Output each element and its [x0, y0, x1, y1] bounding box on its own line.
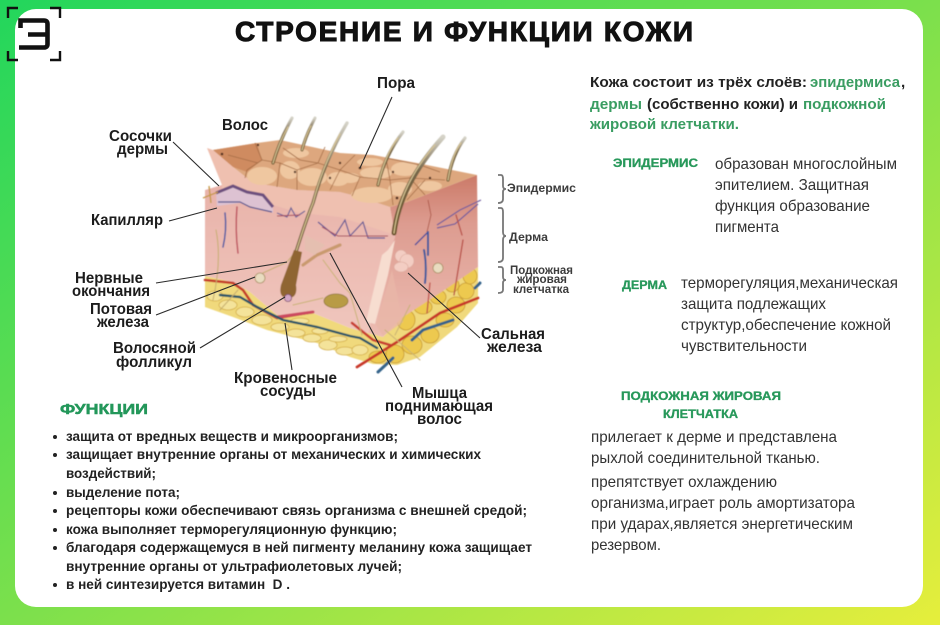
epidermis description: функция образование — [715, 198, 870, 215]
subcutaneous fat heading: КЛЕТЧАТКА — [663, 407, 738, 421]
diagram labels: волос — [417, 411, 462, 428]
diagram labels: Мышца — [412, 385, 467, 402]
functions list: защищает внутренние органы от механических и химических — [66, 446, 481, 462]
epidermis description: эпителием. Защитная — [715, 177, 869, 194]
diagram labels — [72, 75, 545, 428]
intro text — [589, 74, 905, 133]
sebaceous gland — [394, 250, 414, 272]
subcutaneous fat heading — [621, 389, 781, 421]
dermis description: чувствительности — [681, 338, 807, 355]
top surface — [213, 140, 477, 207]
diagram labels: Волосяной — [113, 340, 196, 357]
title: СТРОЕНИЕ И ФУНКЦИИ КОЖИ — [235, 16, 693, 47]
functions list — [53, 428, 532, 592]
intro text: дермы — [590, 96, 642, 113]
functions list: воздействий; — [66, 465, 156, 481]
skin cells — [247, 148, 442, 203]
skin layer labels: Дерма — [509, 230, 548, 244]
skin layer labels: клетчатка — [513, 282, 569, 296]
diagram labels: Сосочки — [109, 128, 172, 145]
right dermis face — [368, 175, 478, 337]
intro text: (собственно кожи) и — [647, 96, 798, 113]
functions list: защита от вредных веществ и микроорганизмов; — [66, 428, 398, 444]
functions list: благодаря содержащемуся в ней пигменту меланину кожа защищает — [66, 539, 532, 555]
logo: number three in corner brackets — [8, 8, 60, 60]
skin layer labels: жировая — [516, 272, 567, 286]
intro text: , — [901, 74, 905, 91]
hair follicle — [280, 250, 302, 302]
layer brackets — [498, 175, 506, 293]
skin cross-section diagram — [203, 118, 481, 372]
intro text: подкожной — [803, 96, 886, 113]
functions list: кожа выполняет терморегуляционную функцию; — [66, 521, 397, 537]
diagram labels: окончания — [72, 283, 150, 300]
dermis description: защита подлежащих — [681, 296, 826, 313]
subcutaneous fat description: резервом. — [591, 537, 661, 554]
epidermis description: образован многослойным — [715, 156, 897, 173]
diagram labels: Сальная — [481, 326, 545, 343]
dermis description: структур,обеспечение кожной — [681, 317, 891, 334]
skin layer labels: Подкожная — [510, 263, 573, 277]
diagram labels: фолликул — [116, 354, 192, 371]
dermis description: терморегуляция,механическая — [681, 275, 898, 292]
dermis heading: ДЕРМА — [622, 278, 667, 292]
functions heading: ФУНКЦИИ — [60, 401, 148, 418]
epidermis description: пигмента — [715, 219, 779, 236]
diagram labels: Кровеносные — [234, 370, 337, 387]
skin layer labels: Эпидермис — [507, 181, 576, 195]
intro text: Кожа состоит из трёх слоёв: — [590, 74, 807, 91]
hairs — [273, 118, 465, 255]
subcutaneous fat description: прилегает к дерме и представлена — [591, 429, 837, 446]
leader lines — [156, 97, 480, 387]
subcutaneous fat description: организма,играет роль амортизатора — [591, 495, 855, 512]
nerves and muscle — [213, 230, 420, 360]
skin layer labels — [507, 181, 576, 296]
diagram labels: железа — [96, 314, 149, 331]
functions list: внутренние органы от ультрафиолетовых лучей; — [66, 558, 402, 574]
diagram labels: Волос — [222, 117, 268, 134]
diagram labels: Капилляр — [91, 212, 163, 229]
diagram labels: Пора — [377, 75, 415, 92]
functions list: в ней синтезируется витамин D . — [66, 576, 290, 592]
fat layer — [205, 267, 478, 365]
blood vessels — [205, 207, 480, 372]
subcutaneous fat description — [591, 429, 855, 554]
sweat gland — [255, 263, 443, 283]
skin cell creases — [228, 143, 445, 205]
diagram labels: Потовая — [90, 301, 152, 318]
subcutaneous fat description: препятствует охлаждению — [591, 474, 777, 491]
functions list: выделение пота; — [66, 484, 180, 500]
functions list: рецепторы кожи обеспечивают связь организма с внешней средой; — [66, 502, 527, 518]
diagram labels: Нервные — [75, 270, 143, 287]
intro text: жировой клетчатки. — [589, 116, 739, 133]
diagram labels: сосуды — [260, 383, 316, 400]
diagram labels: железа — [486, 339, 542, 356]
epidermis heading: ЭПИДЕРМИС — [613, 156, 698, 170]
epidermis description — [715, 156, 897, 236]
diagram labels: поднимающая — [385, 398, 493, 415]
subcutaneous fat heading: ПОДКОЖНАЯ ЖИРОВАЯ — [621, 389, 781, 403]
subcutaneous fat description: рыхлой соединительной тканью. — [591, 450, 820, 467]
diagram labels: дермы — [117, 141, 168, 158]
papillae and capillaries — [203, 186, 481, 245]
subcutaneous fat description: при ударах,является энергетическим — [591, 516, 853, 533]
pale fold at the corner — [366, 240, 395, 324]
dermis description — [681, 275, 898, 355]
left dermis face — [205, 178, 395, 333]
pores — [221, 144, 431, 199]
intro text: эпидермиса — [810, 74, 901, 91]
olive gland — [324, 294, 348, 308]
epidermis band — [207, 148, 395, 235]
